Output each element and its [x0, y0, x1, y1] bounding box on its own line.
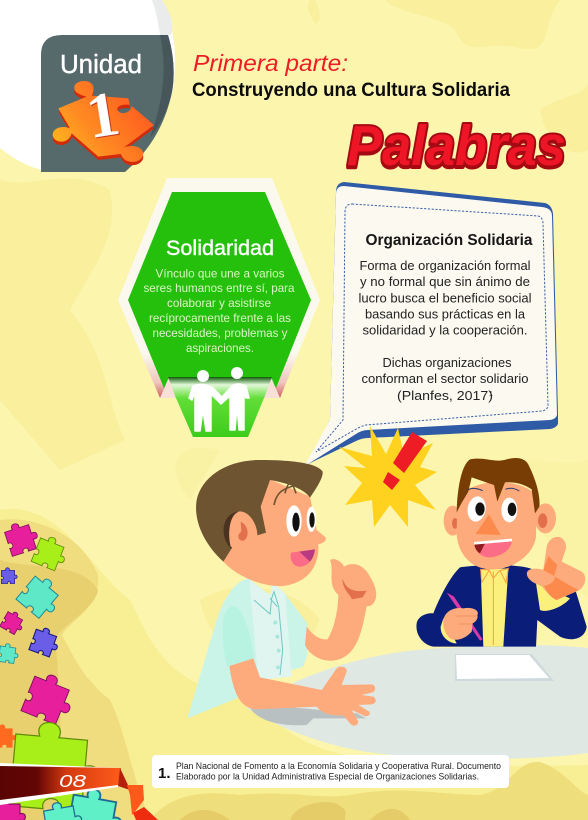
hair [196, 460, 323, 562]
solidaridad heading: Solidaridad [166, 236, 274, 260]
bubble text: Forma de organización formal [360, 258, 531, 273]
solidaridad definition: seres humanos entre sí, para [144, 281, 295, 295]
footnote text: Plan Nacional de Fomento a la Economía Solidaria y Cooperativa Rural. Documento [176, 761, 501, 771]
icon: orange puzzle piece with number 1: 1 [81, 77, 124, 152]
hair [457, 458, 540, 513]
forearm and hand [229, 658, 376, 726]
icon: two people shaking hands [189, 367, 249, 431]
panel: solidaridad hexagon [118, 178, 320, 437]
ears [444, 506, 462, 536]
hand with pen [536, 583, 570, 611]
unit badge [0, 0, 175, 172]
face [466, 495, 488, 523]
head [223, 479, 326, 586]
solidaridad definition: necesidades, problemas y [152, 326, 288, 340]
bubble text: basando sus prácticas en la [365, 306, 526, 322]
solidaridad definition [144, 266, 295, 355]
solidaridad definition: aspiraciones. [186, 341, 254, 355]
paper on table [455, 654, 554, 681]
section heading: primera parte: Primera parte: [193, 50, 348, 76]
raised arm [305, 593, 367, 661]
white corner circle [0, 0, 175, 172]
puzzle pieces cluster [0, 518, 126, 820]
bubble text: solidaridad y la cooperación. [362, 322, 528, 338]
unidad label: Unidad [60, 51, 142, 79]
bubble text: lucro busca el beneficio social [358, 290, 532, 306]
page number banner [0, 763, 158, 820]
ear [224, 511, 242, 549]
icon: yellow starburst with exclamation [339, 426, 437, 527]
pointing hand [527, 537, 585, 600]
shirt [481, 568, 508, 647]
character: man in light shirt [187, 460, 376, 726]
page number: 08 [59, 771, 86, 791]
footnote box [152, 755, 509, 788]
face [286, 505, 302, 537]
icon: orange puzzle piece with number 1 [53, 77, 154, 165]
bubble text [358, 258, 532, 403]
grey tab [41, 35, 174, 172]
shirt [187, 578, 307, 718]
table hand shadow [248, 703, 367, 725]
panel: speech bubble organizacion solidaria [305, 182, 558, 465]
ribbon with people [160, 367, 280, 437]
bubble text: y no formal que sin ánimo de [360, 274, 530, 289]
solidaridad definition: colaborar y asistirse [167, 296, 271, 310]
head [457, 482, 537, 569]
footnote text: Elaborado por la Unidad Administrativa Especial de Organizaciones Solidarias. [176, 772, 479, 782]
solidaridad definition: recíprocamente frente a las [149, 311, 291, 325]
footnote number: 1. [158, 765, 171, 782]
footnote text [176, 761, 501, 782]
bubble text: 1 [489, 391, 493, 398]
table [247, 645, 588, 759]
bubble text: conforman el sector solidario [362, 371, 528, 386]
title: Palabras: Palabras [347, 114, 566, 178]
bubble text: Dichas organizaciones [382, 355, 512, 370]
bubble heading: Organización Solidaria [366, 232, 533, 249]
bubble text: (Planfes, 2017) [397, 388, 493, 403]
character: man in blue suit [416, 458, 587, 647]
section subtitle: Construyendo una Cultura Solidaria [192, 79, 510, 101]
solidaridad definition: Vínculo que une a varios [156, 266, 284, 280]
suit [416, 565, 587, 647]
